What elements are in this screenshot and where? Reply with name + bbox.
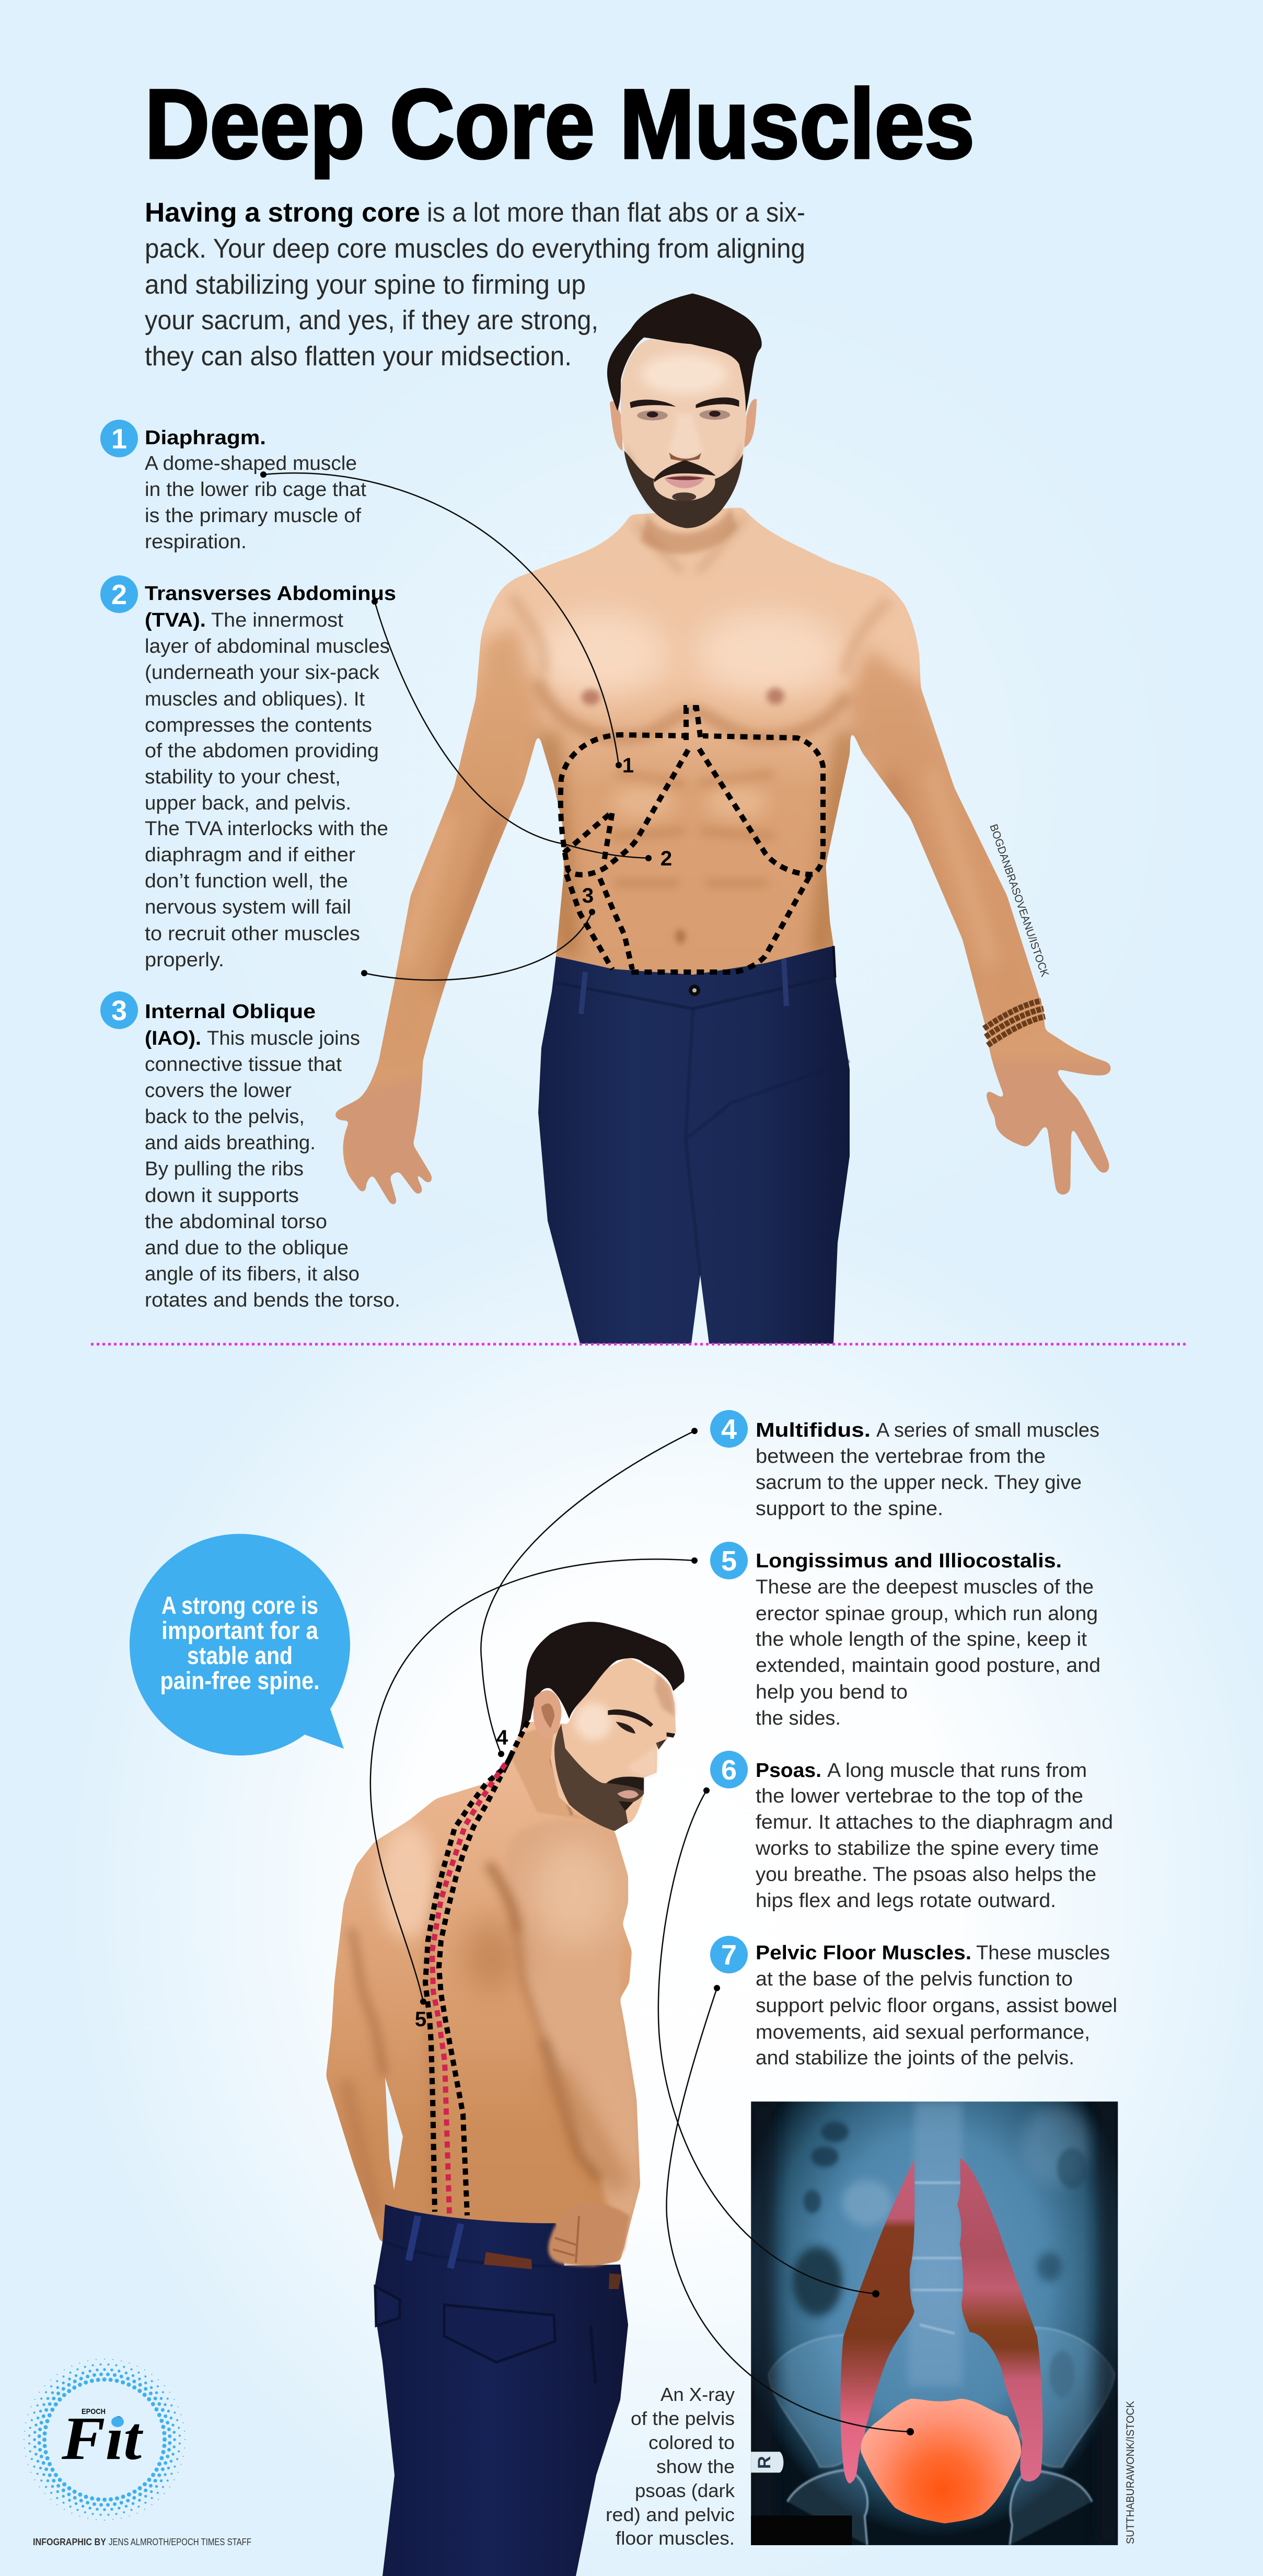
item 1: diaphragm	[100, 420, 366, 553]
item 4: multifidus: Multifidus.	[756, 1419, 871, 1441]
item 6: psoas: hips flex and legs rotate outward.	[756, 1890, 1056, 1912]
body skin	[334, 507, 1113, 1212]
halftone ring	[24, 2359, 185, 2520]
item 5: longissimus and illiocostalis: the whole length of the spine, keep it	[756, 1628, 1087, 1650]
item 5: longissimus and illiocostalis: These are the deepest muscles of the	[756, 1576, 1094, 1598]
callout dots	[260, 471, 914, 2435]
item 6: psoas: works to stabilize the spine every time	[755, 1838, 1099, 1859]
intro paragraph: pack. Your deep core muscles do everything from aligning	[145, 234, 805, 264]
item 2: transverses abdominus: diaphragm and if either	[145, 844, 355, 866]
line 4	[481, 1431, 694, 1754]
item 2: transverses abdominus: stability to your chest,	[145, 766, 341, 788]
intro paragraph: Having a strong core	[145, 198, 420, 228]
item 5: longissimus and illiocostalis	[710, 1542, 1100, 1729]
item 2: transverses abdominus: don’t function well, the	[145, 870, 348, 892]
item 5: longissimus and illiocostalis: Longissimus and Illiocostalis.	[756, 1550, 1062, 1572]
item 3: internal oblique: Internal Oblique	[145, 1001, 316, 1023]
pelvic floor	[861, 2399, 1021, 2523]
line 2	[375, 602, 648, 858]
item 3: internal oblique: and aids breathing.	[145, 1132, 316, 1154]
psoas, left	[840, 2159, 914, 2483]
intro paragraph	[145, 198, 805, 372]
item 7: pelvic floor muscles	[710, 1936, 1117, 2069]
x-ray caption: floor muscles.	[616, 2527, 735, 2549]
staff credit: INFOGRAPHIC BY	[33, 2537, 106, 2547]
psoas, right	[957, 2158, 1042, 2481]
item 1: diaphragm: respiration.	[145, 531, 247, 553]
item 3: internal oblique: down it supports	[145, 1185, 299, 1207]
item 6: psoas: 6	[721, 1754, 737, 1786]
x-ray caption: show the	[656, 2456, 735, 2477]
item 5: longissimus and illiocostalis: the sides.	[756, 1707, 841, 1729]
back skin	[326, 1722, 640, 2266]
item 4: multifidus: between the vertebrae from the	[756, 1446, 1046, 1468]
item 1: diaphragm: in the lower rib cage that	[145, 479, 366, 501]
x-ray caption: An X-ray	[661, 2384, 735, 2405]
item 3: internal oblique: rotates and bends the torso.	[145, 1289, 400, 1311]
head	[607, 293, 762, 554]
body number labels: 3	[582, 884, 594, 907]
speech bubble: stable and	[187, 1642, 293, 1669]
line 7	[667, 1988, 910, 2432]
item 2: transverses abdominus: to recruit other muscles	[145, 923, 360, 945]
item 1: diaphragm: is the primary muscle of	[145, 505, 361, 527]
item 2: transverses abdominus: properly.	[145, 949, 224, 971]
item 7: pelvic floor muscles: 7	[721, 1939, 737, 1971]
item 6: psoas: the lower vertebrae to the top of the	[756, 1785, 1083, 1807]
line 6	[658, 1791, 876, 2294]
item 6: psoas: Psoas.	[756, 1760, 821, 1782]
item 3: internal oblique: connective tissue that	[145, 1054, 342, 1076]
speech bubble: A strong core is	[161, 1591, 318, 1619]
item 3: internal oblique: covers the lower	[145, 1080, 292, 1102]
intro paragraph: your sacrum, and yes, if they are strong,	[145, 305, 598, 336]
x-ray credit: SUTTHABURAWONK/ISTOCK	[1125, 2401, 1137, 2544]
item 3: internal oblique: back to the pelvis,	[145, 1106, 305, 1128]
item 2: transverses abdominus	[100, 575, 396, 971]
item 2: transverses abdominus: The innermost	[211, 609, 343, 631]
staff credit: JENS ALMROTH/EPOCH TIMES STAFF	[109, 2537, 251, 2547]
item 7: pelvic floor muscles: and stabilize the joints of the pelvis.	[756, 2047, 1074, 2069]
item 7: pelvic floor muscles: at the base of the pelvis function to	[756, 1968, 1073, 1990]
item 3: internal oblique: angle of its fibers, it also	[145, 1263, 360, 1285]
hand on hip	[548, 2202, 630, 2266]
item 2: transverses abdominus: (underneath your six-pack	[145, 662, 380, 684]
x-ray caption: psoas (dark	[635, 2480, 735, 2501]
item 2: transverses abdominus: layer of abdominal muscles	[145, 636, 390, 657]
item 2: transverses abdominus: muscles and obliques). It	[145, 688, 365, 710]
line 1	[263, 473, 619, 765]
x-ray marker	[751, 2452, 783, 2473]
staff credit	[33, 2537, 251, 2547]
speech bubble: important for a	[161, 1616, 319, 1644]
item 7: pelvic floor muscles: movements, aid sexual performance,	[756, 2021, 1090, 2043]
item 1: diaphragm: A dome-shaped muscle	[145, 453, 357, 475]
item 1: diaphragm: Diaphragm.	[145, 427, 266, 449]
item 1: diaphragm: 1	[111, 423, 127, 455]
body number labels: 2	[661, 847, 672, 870]
item 6: psoas	[710, 1751, 1113, 1912]
item 2: transverses abdominus: The TVA interlocks with the	[145, 818, 388, 840]
body number labels: 1	[622, 754, 634, 777]
x-ray caption	[606, 2384, 735, 2549]
item 6: psoas: you breathe. The psoas also helps the	[756, 1864, 1096, 1886]
trousers, back	[375, 2204, 628, 2576]
item 4: multifidus: support to the spine.	[756, 1498, 943, 1520]
item 5: longissimus and illiocostalis: extended, maintain good posture, and	[756, 1655, 1100, 1677]
photo: man from the front	[334, 293, 1113, 1344]
spine dashed outlines	[425, 1722, 528, 2215]
credit: front photo: BOGDANBRASOVEANU/ISTOCK	[987, 823, 1051, 978]
item 3: internal oblique: By pulling the ribs	[145, 1158, 304, 1180]
trousers	[538, 946, 850, 1344]
item 3: internal oblique	[100, 991, 400, 1311]
photo: man from the back	[326, 1622, 685, 2576]
gap between arm and torso	[385, 2077, 403, 2190]
callout lines	[263, 473, 910, 2432]
item 4: multifidus	[710, 1410, 1099, 1520]
speech bubble	[130, 1534, 350, 1755]
x-ray letter: R	[755, 2456, 774, 2469]
intro paragraph: and stabilizing your spine to firming up	[145, 270, 586, 300]
x-ray caption: of the pelvis	[631, 2408, 735, 2429]
item 7: pelvic floor muscles: These muscles	[976, 1942, 1110, 1964]
line 3	[364, 912, 592, 980]
divider	[91, 1343, 1186, 1345]
item 2: transverses abdominus: (TVA).	[145, 609, 206, 631]
logo: Epoch Fit	[24, 2359, 185, 2520]
item 2: transverses abdominus: compresses the contents	[145, 714, 372, 736]
item 5: longissimus and illiocostalis: erector spinae group, which run along	[756, 1603, 1098, 1625]
item 2: transverses abdominus: 2	[111, 579, 127, 610]
body number labels: 5	[415, 2008, 426, 2031]
item 4: multifidus: sacrum to the upper neck. They give	[756, 1472, 1082, 1494]
speech bubble: pain-free spine.	[160, 1667, 320, 1694]
item 3: internal oblique: This muscle joins	[207, 1027, 360, 1049]
intro paragraph: they can also flatten your midsection.	[145, 341, 572, 372]
intro paragraph: is a lot more than flat abs or a six-	[427, 198, 805, 228]
item 5: longissimus and illiocostalis: 5	[721, 1545, 737, 1577]
item 4: multifidus: A series of small muscles	[876, 1419, 1099, 1441]
x-ray image	[751, 2101, 1120, 2545]
item 4: multifidus: 4	[721, 1414, 737, 1445]
item 2: transverses abdominus: nervous system will fail	[145, 896, 351, 918]
abdominal muscle dashed outlines	[561, 708, 823, 972]
logo: Epoch Fit: EPOCH	[82, 2407, 106, 2416]
item 3: internal oblique: and due to the oblique	[145, 1237, 349, 1259]
item 2: transverses abdominus: of the abdomen providing	[145, 740, 379, 762]
body number labels	[415, 754, 672, 2031]
line 5	[370, 1559, 694, 2002]
item 3: internal oblique: (IAO).	[145, 1027, 201, 1049]
item 2: transverses abdominus: Transverses Abdominus	[145, 583, 396, 605]
item 6: psoas: A long muscle that runs from	[827, 1760, 1087, 1782]
item 7: pelvic floor muscles: support pelvic floor organs, assist bowel	[756, 1995, 1117, 2017]
item 5: longissimus and illiocostalis: help you bend to	[756, 1681, 908, 1703]
item 2: transverses abdominus: upper back, and pelvis.	[145, 792, 351, 814]
x-ray caption: red) and pelvic	[606, 2504, 735, 2525]
item 3: internal oblique: 3	[111, 995, 127, 1026]
title: Deep Core Muscles	[145, 69, 975, 179]
item 6: psoas: femur. It attaches to the diaphragm and	[756, 1811, 1113, 1833]
bracelets	[984, 1001, 1045, 1045]
body number labels: 4	[496, 1726, 508, 1749]
item 3: internal oblique: the abdominal torso	[145, 1211, 327, 1233]
x-ray caption: colored to	[648, 2432, 735, 2453]
redaction block	[751, 2515, 852, 2545]
logo: Epoch Fit: Fit	[61, 2404, 143, 2473]
head, three-quarter view	[511, 1622, 685, 1831]
item 7: pelvic floor muscles: Pelvic Floor Muscles.	[756, 1942, 971, 1964]
